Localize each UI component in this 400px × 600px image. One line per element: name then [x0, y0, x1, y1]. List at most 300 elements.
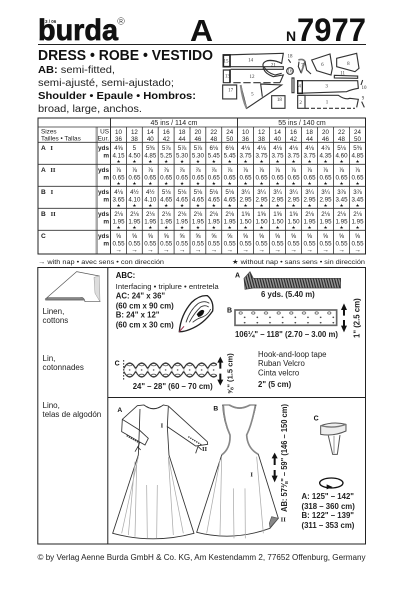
size range letter: A — [190, 13, 213, 48]
row B II: 1⅝ — [257, 211, 267, 218]
row B I: 5⅛ — [162, 189, 171, 196]
dress length: AB: 57⅜" – 59" (146 – 150 cm) — [280, 404, 289, 512]
illustration: dress A — [113, 405, 208, 539]
notion A: cord: A — [235, 272, 240, 279]
dress length arrows — [272, 453, 278, 482]
row labels: A I — [41, 145, 53, 152]
row B I: 3⅞ — [337, 189, 347, 196]
row B II: 1.95 — [144, 218, 157, 226]
logo: burda: burda — [38, 14, 118, 47]
row C: 0.55 — [192, 240, 204, 248]
waist measurements: B: 122" – 139" — [302, 511, 354, 520]
row C: 0.55 — [287, 240, 300, 248]
row A II: ⅞ — [179, 167, 185, 174]
row B II: 2⅛ — [178, 211, 187, 218]
icon: fabric bolt — [45, 272, 100, 302]
fabric text: Lino, — [42, 401, 60, 410]
row B I: 4.65 — [224, 196, 236, 204]
row A II: ⅞ — [339, 167, 345, 174]
trim length: 24" – 28" (60 – 70 cm) — [133, 382, 213, 391]
pattern pieces diagram: 7 — [301, 64, 304, 69]
row A I — [112, 145, 364, 164]
row B I: 2.95 — [303, 196, 316, 204]
row B II: 2⅛ — [146, 211, 155, 218]
row C: ⅝ — [211, 233, 217, 240]
row C: ⅝ — [275, 233, 281, 240]
pattern pieces diagram: 15 — [224, 60, 229, 65]
row B I: 3¼ — [289, 189, 299, 196]
row B I: 3¼ — [321, 189, 331, 196]
row C: 0.55 — [303, 240, 316, 248]
table width headers: 55 ins / 140 cm — [278, 120, 326, 127]
size header row: 12 — [131, 129, 138, 136]
table width headers: 45 ins / 114 cm — [151, 120, 198, 127]
size header row: 48 — [338, 136, 345, 143]
size header row: 16 — [290, 129, 297, 136]
row A I: ★★★★★★★★★★★★★★★★ — [116, 159, 360, 164]
size header row: 42 — [290, 136, 297, 143]
notion C: trim: C — [115, 361, 120, 368]
units: yds — [98, 211, 109, 218]
logo: burda: R — [119, 19, 123, 25]
row A II: ⅞ — [243, 167, 249, 174]
row C: ⅝ — [195, 233, 201, 240]
row B I: 3¼ — [273, 189, 283, 196]
description — [38, 64, 196, 115]
row A I: 3.75 — [271, 152, 284, 160]
size header row: Sizes — [41, 128, 57, 136]
pattern pieces diagram — [223, 53, 367, 108]
row B II: 1.50 — [255, 218, 268, 226]
units: m — [103, 218, 109, 226]
waist measurements: A: 125" – 142" — [302, 492, 354, 501]
row B II: 1.95 — [192, 218, 204, 226]
fabric text: telas de algodón — [42, 410, 101, 419]
pattern pieces diagram: 11 — [340, 71, 346, 76]
row A I: 4⅛ — [289, 145, 299, 152]
row B II: 1⅝ — [289, 211, 299, 218]
row B II: 2⅛ — [194, 211, 203, 218]
illustration: dress A: A — [117, 407, 122, 414]
row C: 0.55 — [239, 240, 252, 248]
pattern pieces diagram: 14 — [248, 59, 254, 64]
row A II: 0.65 — [112, 174, 125, 182]
row C: ⅝ — [164, 233, 170, 240]
size header row: Eur. — [98, 136, 109, 142]
row A II: ⅞ — [259, 167, 265, 174]
row B I: 4.65 — [192, 196, 204, 204]
row labels: A II — [41, 167, 56, 174]
row B II: 2⅛ — [114, 211, 124, 218]
row B II: ★★★★★★★★★★★★★★★★ — [116, 225, 360, 230]
pattern pieces diagram: 2 — [299, 101, 302, 106]
logo: burda: 3 / 06 — [45, 19, 57, 24]
row A II: 0.65 — [208, 174, 220, 182]
row B I: 5⅛ — [209, 189, 219, 196]
size header row: 18 — [306, 129, 313, 136]
row labels: B I — [41, 189, 54, 196]
tape width: 1" (2.5 cm) — [352, 298, 362, 338]
row B I: 2.95 — [239, 196, 252, 204]
row C: ⅝ — [132, 233, 138, 240]
row A I: 5⅞ — [194, 145, 203, 152]
illustration: dress B: I — [250, 472, 253, 479]
row B II: 2⅛ — [162, 211, 171, 218]
row A I: 4.85 — [351, 152, 364, 160]
row B I: 3¼ — [241, 189, 251, 196]
units: yds — [98, 167, 109, 174]
row A I: 3.75 — [239, 152, 252, 160]
row C: 0.55 — [144, 240, 157, 248]
row A II: 0.65 — [287, 174, 300, 182]
row A I: 5.45 — [208, 152, 220, 160]
size header row: 24 — [226, 129, 234, 136]
pattern pieces diagram: 5 — [251, 93, 254, 98]
illustration: dress B — [197, 405, 286, 538]
row A II: ⅞ — [132, 167, 138, 174]
units — [98, 145, 109, 248]
units: m — [103, 240, 109, 248]
row A II: ⅞ — [195, 167, 201, 174]
row B I: 3¼ — [305, 189, 315, 196]
illustration: dress A: II — [202, 446, 208, 453]
size header row: 44 — [179, 136, 186, 143]
title: DRESS • ROBE • VESTIDO — [38, 48, 213, 64]
row A II: ⅞ — [116, 167, 122, 174]
size header row: 42 — [163, 136, 170, 143]
row C: 0.55 — [176, 240, 189, 248]
fabric text — [42, 307, 101, 419]
row C: 0.55 — [160, 240, 173, 248]
pattern number: N — [286, 28, 296, 44]
fabric text: cotonnades — [42, 363, 84, 372]
hook-and-loop text: Ruban Velcro — [258, 359, 305, 368]
row A I: 3.75 — [287, 152, 300, 160]
units: yds — [98, 233, 109, 240]
pattern pieces diagram: 4 — [298, 84, 301, 89]
row B I: 4⅛ — [114, 189, 124, 196]
row A I: 6⅛ — [225, 145, 235, 152]
row A I: 3.75 — [303, 152, 316, 160]
row B I: 3⅞ — [353, 189, 363, 196]
yardage table — [38, 118, 366, 254]
row A I: 5.45 — [224, 152, 236, 160]
row A I: 5⅞ — [178, 145, 187, 152]
units: yds — [98, 145, 109, 152]
size header row: 36 — [242, 136, 249, 143]
waist measurements — [302, 492, 355, 530]
row B II: 2⅛ — [321, 211, 331, 218]
tape width arrows — [341, 303, 347, 332]
row B II — [112, 211, 364, 230]
size header row: 14 — [147, 129, 154, 136]
row A II: 0.65 — [319, 174, 332, 182]
cord length: 6 yds. (5.40 m) — [261, 290, 315, 299]
size header row: 10 — [115, 129, 122, 136]
icon: iron — [179, 296, 213, 332]
row B II: 1.95 — [176, 218, 189, 226]
row B I: 4½ — [130, 189, 139, 196]
row A II: ⅞ — [323, 167, 329, 174]
row B I: 2.95 — [255, 196, 268, 204]
row labels: C — [41, 233, 46, 240]
row A I: 5 — [133, 145, 137, 152]
row B II: 1.95 — [160, 218, 173, 226]
row B I: 3.65 — [112, 196, 125, 204]
hook-and-loop text: Hook-and-loop tape — [258, 350, 326, 359]
row A II: 0.65 — [335, 174, 348, 182]
row A I: 4.15 — [112, 152, 125, 160]
row A I: 5.30 — [192, 152, 204, 160]
size header row: 12 — [258, 129, 265, 136]
pattern pieces diagram: 6 — [321, 63, 324, 68]
description: broad, large, anchos. — [38, 103, 142, 115]
row A II: 0.65 — [160, 174, 173, 182]
table width headers — [151, 120, 326, 127]
row C: 0.55 — [255, 240, 268, 248]
row A II: ⅞ — [307, 167, 313, 174]
tape length: 106¼" – 118" (2.70 – 3.00 m) — [235, 330, 338, 339]
size header row: 48 — [210, 136, 218, 143]
fabric text: Lin, — [42, 354, 55, 363]
row C: 0.55 — [335, 240, 348, 248]
row A II: ⅞ — [164, 167, 170, 174]
row A II: ⅞ — [275, 167, 281, 174]
row B II: 1⅝ — [241, 211, 251, 218]
row A I: 4⅛ — [305, 145, 315, 152]
row B I: 4.10 — [128, 196, 141, 204]
size header row: 36 — [115, 136, 122, 143]
row B I: 3.45 — [351, 196, 364, 204]
row A I: 4.50 — [128, 152, 141, 160]
row A I: 6⅛ — [209, 145, 219, 152]
legend: without nap: ★ without nap • sans sens • sin dirección — [232, 259, 365, 266]
illustration: belt C: C — [314, 416, 319, 423]
size header row: 14 — [274, 129, 281, 136]
row A II: ⅞ — [211, 167, 217, 174]
row B II: 1.95 — [224, 218, 236, 226]
size header row: 10 — [242, 129, 249, 136]
size header row: 50 — [354, 136, 361, 143]
row B I: 2.95 — [319, 196, 332, 204]
trim width arrows — [217, 357, 223, 386]
legend: with nap: → with nap • avec sens • con dirección — [38, 259, 164, 266]
row B II: 1.50 — [239, 218, 252, 226]
row B II: 1.95 — [303, 218, 316, 226]
row A II: 0.65 — [176, 174, 189, 182]
size header row: 44 — [306, 136, 313, 143]
description: semi-ajusté, semi-ajustado; — [38, 77, 174, 89]
row B II: 1.50 — [287, 218, 300, 226]
row B I: 5⅛ — [178, 189, 187, 196]
row B II: 2⅛ — [353, 211, 363, 218]
notion B: tape — [227, 307, 337, 325]
fabric text: cottons — [42, 316, 68, 325]
row A I: 3.75 — [255, 152, 268, 160]
row B I: 4.65 — [160, 196, 173, 204]
hook-and-loop text — [258, 350, 326, 389]
row A I: 4.60 — [335, 152, 348, 160]
interfacing text: ABC: — [116, 271, 135, 280]
row A I: 4⅝ — [114, 145, 124, 152]
size header row: 22 — [338, 129, 345, 136]
size header row: 40 — [147, 136, 154, 143]
size header row: Tailles • Tallas — [41, 136, 81, 142]
row A I: 4.85 — [144, 152, 157, 160]
size header row: 40 — [274, 136, 281, 143]
row A II: 0.65 — [192, 174, 204, 182]
size header row — [41, 128, 361, 143]
row C: 0.55 — [112, 240, 125, 248]
pattern pieces diagram: 18 — [277, 98, 282, 103]
pattern pieces diagram: 16 — [288, 70, 293, 75]
row C: ⅝ — [259, 233, 265, 240]
row C: ⅝ — [148, 233, 154, 240]
notion A: cord — [235, 272, 341, 289]
description: Shoulder • Epaule • Hombros: — [38, 90, 196, 102]
units: m — [103, 174, 109, 182]
row B II: 2⅛ — [130, 211, 140, 218]
row A II: 0.65 — [128, 174, 141, 182]
row B I: 3.45 — [335, 196, 348, 204]
row B II: 2⅛ — [225, 211, 235, 218]
row B I: 3¼ — [257, 189, 267, 196]
row B I: ★★★★★★★★★★★★★★★★ — [116, 203, 360, 208]
row A II: 0.65 — [239, 174, 252, 182]
row A II: ⅞ — [148, 167, 154, 174]
row C: ⅝ — [291, 233, 297, 240]
size header row: 38 — [258, 136, 265, 143]
description: AB: semi-fitted, — [38, 64, 115, 76]
fabric text: Linen, — [42, 307, 64, 316]
row A I: 5⅜ — [146, 145, 155, 152]
size header row: 46 — [322, 136, 329, 143]
row B I: 2.95 — [271, 196, 284, 204]
pattern pieces diagram: 21 — [271, 64, 276, 69]
row A I: 4⅞ — [321, 145, 331, 152]
row A II: ⅞ — [227, 167, 233, 174]
row labels: B II — [41, 211, 56, 218]
row B II: 2⅛ — [209, 211, 219, 218]
interfacing text: AC: 24" x 36" — [116, 292, 165, 301]
row A I: 4⅛ — [273, 145, 283, 152]
row B I: 4.65 — [176, 196, 189, 204]
size header row: 38 — [131, 136, 138, 143]
illustration: dress A: I — [161, 422, 164, 429]
row A II: 0.65 — [224, 174, 236, 182]
notion C: trim — [115, 360, 217, 380]
units: yds — [98, 189, 109, 196]
row B II: 1.50 — [271, 218, 284, 226]
row B I: 5⅛ — [194, 189, 203, 196]
illustration: dress B: II — [281, 517, 286, 524]
row B II: 2⅛ — [305, 211, 315, 218]
row labels — [41, 145, 56, 240]
row A I: 5⅛ — [337, 145, 347, 152]
row B I — [112, 189, 364, 208]
hook-and-loop text: Cinta velcro — [258, 368, 300, 378]
row A I: 4⅛ — [257, 145, 267, 152]
row A II: 0.65 — [271, 174, 284, 182]
row A I: 5⅜ — [353, 145, 363, 152]
row C: ⅝ — [307, 233, 313, 240]
illustration: dress B: B — [213, 406, 218, 413]
row C: 0.55 — [351, 240, 364, 248]
interfacing text — [116, 271, 219, 329]
size header row: 22 — [210, 129, 218, 136]
row C: 0.55 — [224, 240, 236, 248]
pattern pieces diagram: 17 — [228, 88, 234, 93]
pattern pieces diagram: 13 — [225, 75, 230, 80]
row A II: 0.65 — [303, 174, 316, 182]
size header row: 20 — [322, 129, 329, 136]
size header row: 18 — [179, 129, 186, 136]
waist measurements: (318 – 360 cm) — [302, 502, 355, 511]
row C: ⅝ — [323, 233, 329, 240]
row B II: 1.95 — [112, 218, 125, 226]
row C: ⅝ — [116, 233, 122, 240]
row A I: 4.35 — [319, 152, 332, 160]
row B I: 4½ — [146, 189, 155, 196]
row B I: 2.95 — [287, 196, 300, 204]
row C — [112, 233, 364, 254]
size header row: 20 — [194, 129, 202, 136]
units: m — [103, 196, 109, 204]
row C: ⅝ — [227, 233, 233, 240]
interfacing text: (60 cm x 90 cm) — [116, 302, 174, 310]
size header row: US — [100, 128, 109, 136]
pattern pieces diagram: 18 — [288, 54, 293, 59]
row B II: 2⅛ — [337, 211, 347, 218]
row B II: 1.95 — [351, 218, 364, 226]
icon: waist measure — [320, 478, 343, 489]
size header row: 50 — [226, 136, 234, 143]
interfacing text: Interfacing • triplure • entretela — [116, 282, 219, 291]
size header row: 46 — [194, 136, 202, 143]
pattern number: 7977 — [297, 12, 366, 48]
row A I: 4⅛ — [241, 145, 251, 152]
row C: ⅝ — [179, 233, 185, 240]
row A II: 0.65 — [255, 174, 268, 182]
row A I: 5.30 — [176, 152, 189, 160]
row B II: 1.95 — [335, 218, 348, 226]
row C: 0.55 — [319, 240, 332, 248]
row B II: 1.95 — [208, 218, 220, 226]
row C: →→→→→→→→→→→→→→→→ — [115, 247, 361, 254]
row A II: 0.65 — [351, 174, 364, 182]
row B I: 5⅛ — [225, 189, 235, 196]
trim width: ⅝" (1.5 cm) — [226, 353, 234, 394]
row B II: 1⅝ — [273, 211, 283, 218]
notion B: tape: B — [227, 307, 232, 314]
row A II: ⅞ — [291, 167, 297, 174]
interfacing text: B: 24" x 12" — [116, 310, 160, 320]
pattern pieces diagram: 3 — [325, 84, 328, 89]
size header row: 24 — [354, 129, 361, 136]
lower panel frame — [38, 268, 366, 544]
row C: ⅝ — [355, 233, 361, 240]
row C: ⅝ — [339, 233, 345, 240]
pattern pieces diagram: 8 — [347, 62, 350, 67]
row A II: ★★★★★★★★★★★★★★★★ — [116, 181, 360, 186]
row A I: 5.25 — [160, 152, 173, 160]
hook-and-loop text: 2" (5 cm) — [258, 380, 292, 389]
row B I: 4.10 — [144, 196, 157, 204]
row B II: 1.95 — [128, 218, 141, 226]
pattern pieces diagram: 9 — [362, 96, 365, 101]
pattern pieces diagram: 10 — [362, 86, 367, 91]
row B I: 4.65 — [208, 196, 220, 204]
